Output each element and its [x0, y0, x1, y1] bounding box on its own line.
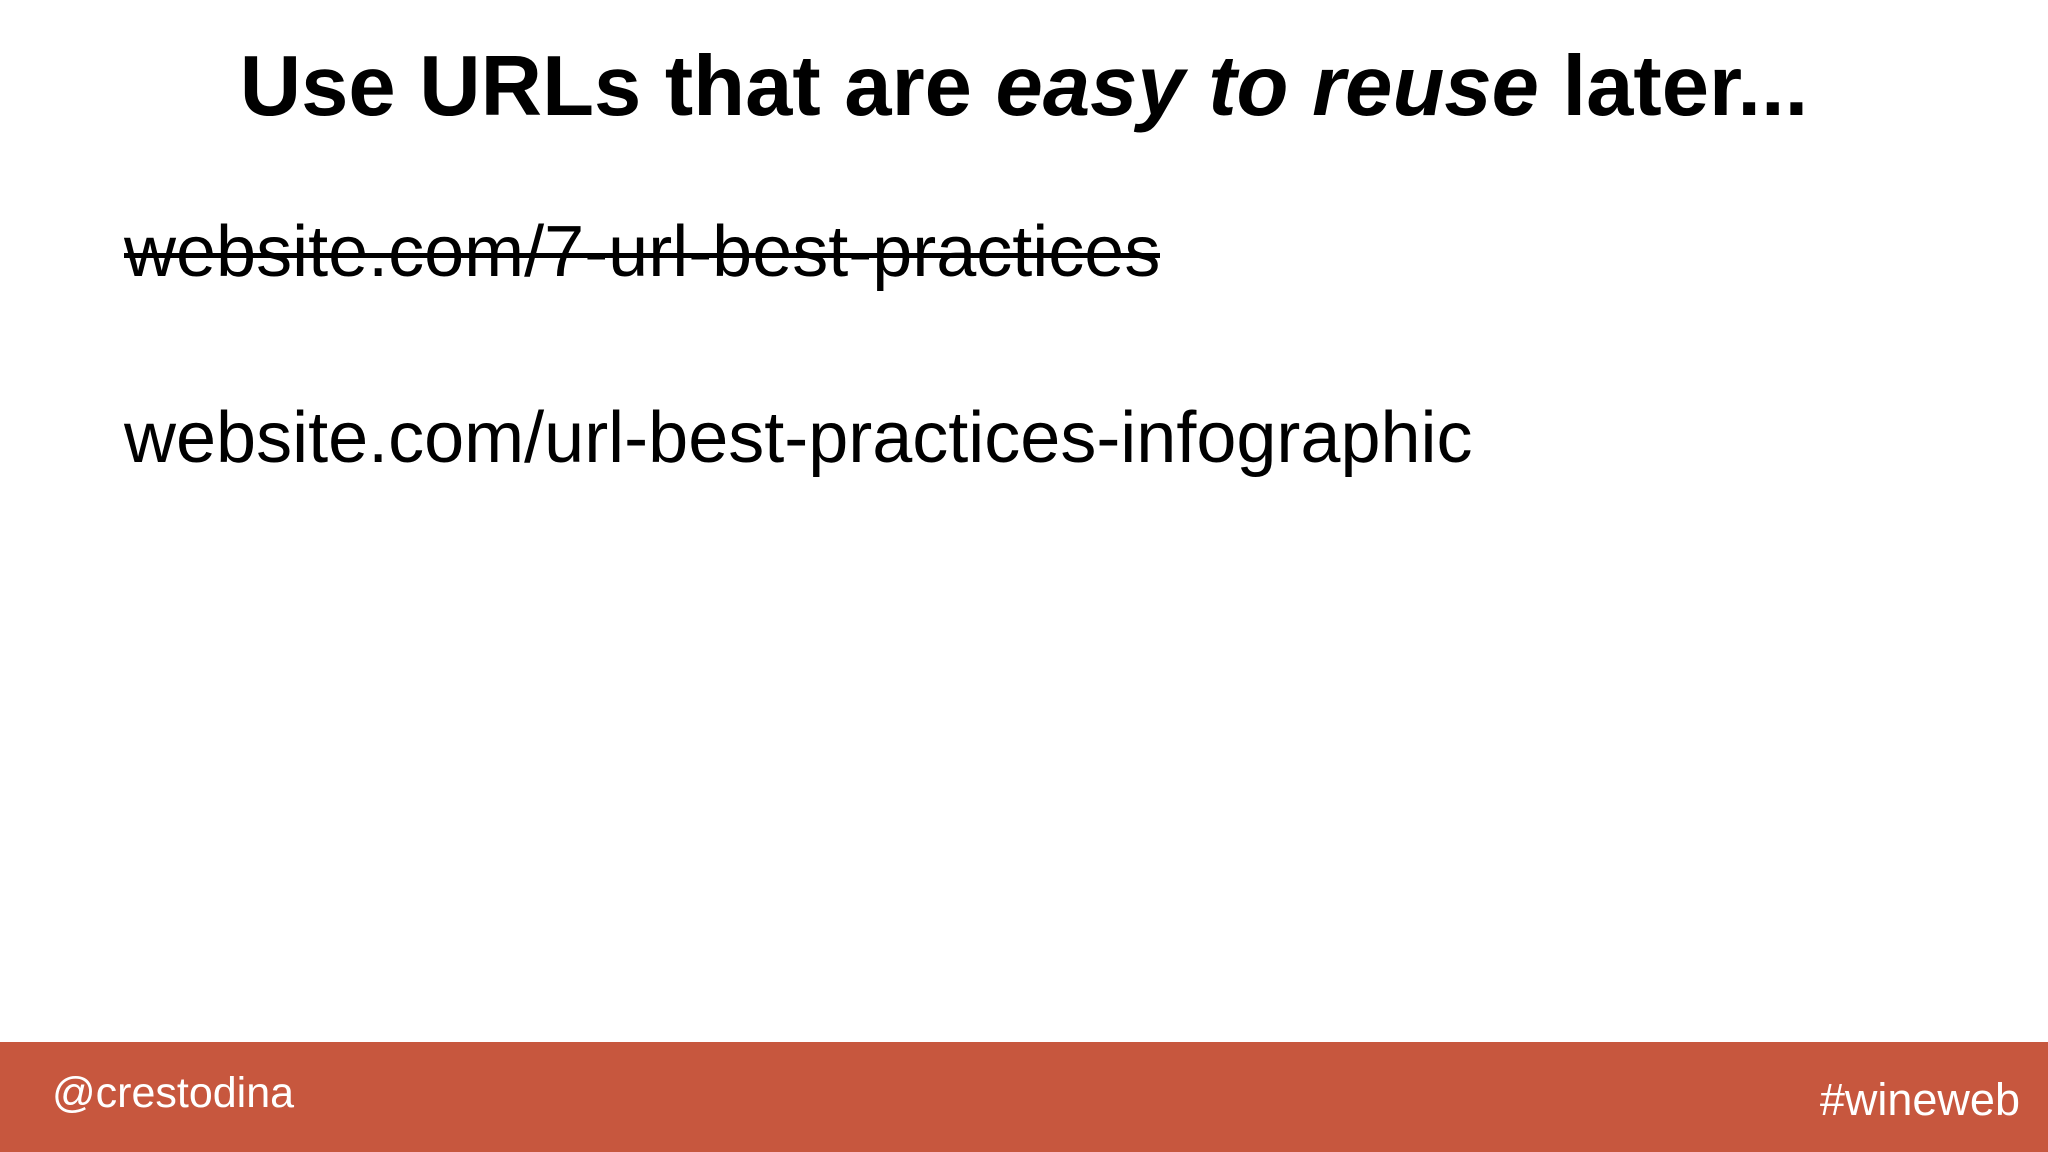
text block: bad URL (struck through): website.com/7-url-best-practices: [124, 212, 1160, 292]
text block: good URL: website.com/url-best-practices-infographic: [124, 398, 1473, 478]
footer handle: @crestodina: [52, 1069, 294, 1117]
footer hashtag: #wineweb: [1820, 1074, 2020, 1125]
footer bar: [0, 1042, 2048, 1152]
title: Use URLs that are easy to reuse later...: [240, 39, 1808, 134]
